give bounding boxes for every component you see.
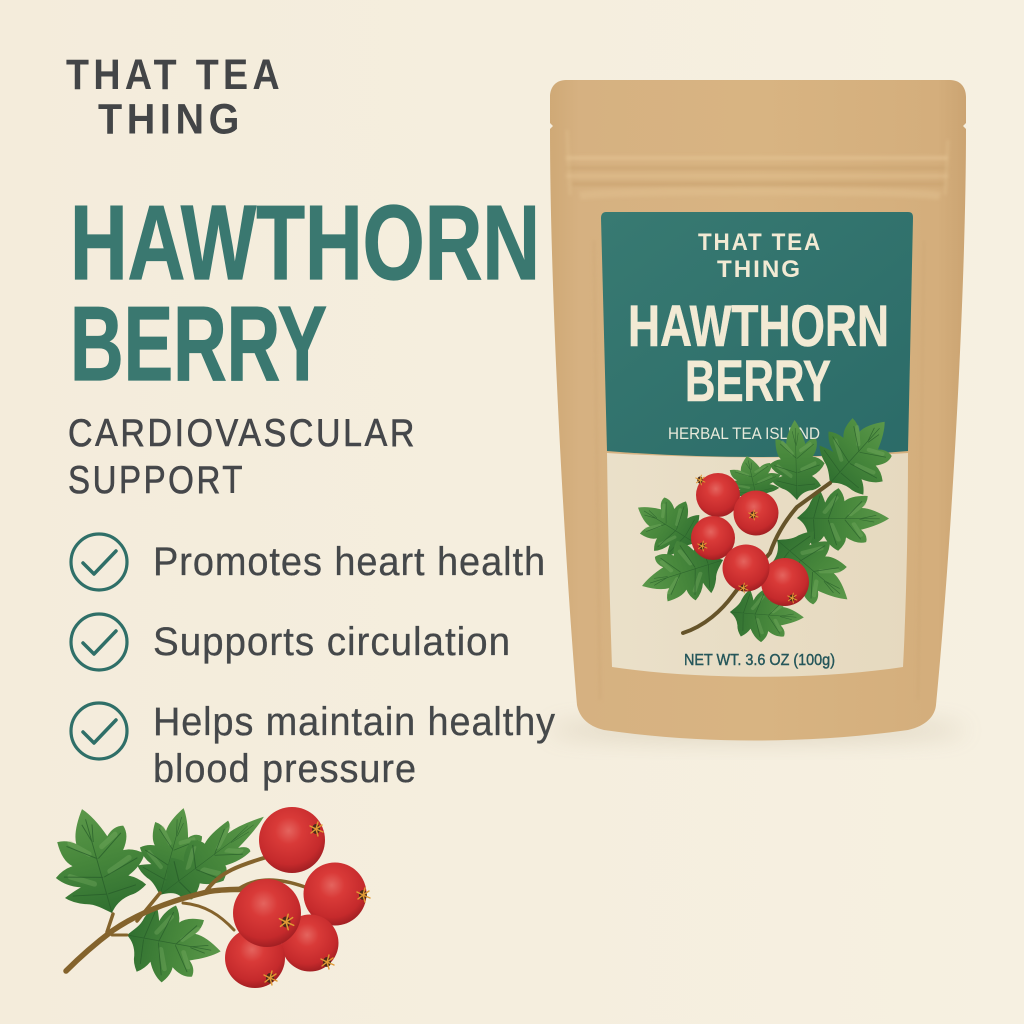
sprig stem xyxy=(683,483,830,633)
pouch illustration: hawthorn sprig xyxy=(623,398,913,646)
main title xyxy=(70,184,540,403)
pouch label title: HAWTHORN xyxy=(628,294,889,359)
main title: HAWTHORN xyxy=(70,184,540,302)
pouch body xyxy=(550,80,966,740)
stems xyxy=(66,857,305,971)
benefit: promotes heart health: Promotes heart health xyxy=(153,540,546,584)
subtitle: SUPPORT xyxy=(68,459,245,502)
brand name: THING xyxy=(98,96,244,144)
pouch shadow xyxy=(547,720,967,740)
benefit: helps maintain healthy blood pressure: blood pressure xyxy=(153,747,417,791)
benefit: promotes heart health xyxy=(71,534,546,590)
teal label panel xyxy=(601,212,913,457)
sprig leaves xyxy=(623,398,913,646)
subtitle xyxy=(68,412,417,502)
pouch label brand: THAT TEA xyxy=(698,229,822,256)
leaves xyxy=(41,797,280,993)
benefit: supports circulation: Supports circulation xyxy=(153,620,511,664)
benefits list xyxy=(71,534,556,791)
subtitle: CARDIOVASCULAR xyxy=(68,412,417,455)
brand name: THAT TEA xyxy=(66,51,284,99)
benefit: helps maintain healthy blood pressure: Helps maintain healthy xyxy=(153,700,556,744)
pouch label brand xyxy=(698,229,822,283)
sprig berries xyxy=(691,473,809,606)
brand name xyxy=(66,51,284,144)
benefit: supports circulation xyxy=(71,614,511,670)
pouch label tagline: HERBAL TEA ISLEND xyxy=(668,425,820,443)
cream label panel xyxy=(607,453,908,677)
pouch label title xyxy=(628,294,889,414)
benefit: helps maintain healthy blood pressure xyxy=(71,700,556,791)
pouch label title: BERRY xyxy=(685,349,831,414)
kraft pouch xyxy=(550,80,966,740)
zipper seal xyxy=(566,130,948,700)
pouch label brand: THING xyxy=(717,256,802,283)
red berries xyxy=(225,807,370,988)
illustration: hawthorn branch xyxy=(41,797,370,993)
net weight: NET WT. 3.6 OZ (100g) xyxy=(684,652,835,669)
main title: BERRY xyxy=(70,285,327,403)
